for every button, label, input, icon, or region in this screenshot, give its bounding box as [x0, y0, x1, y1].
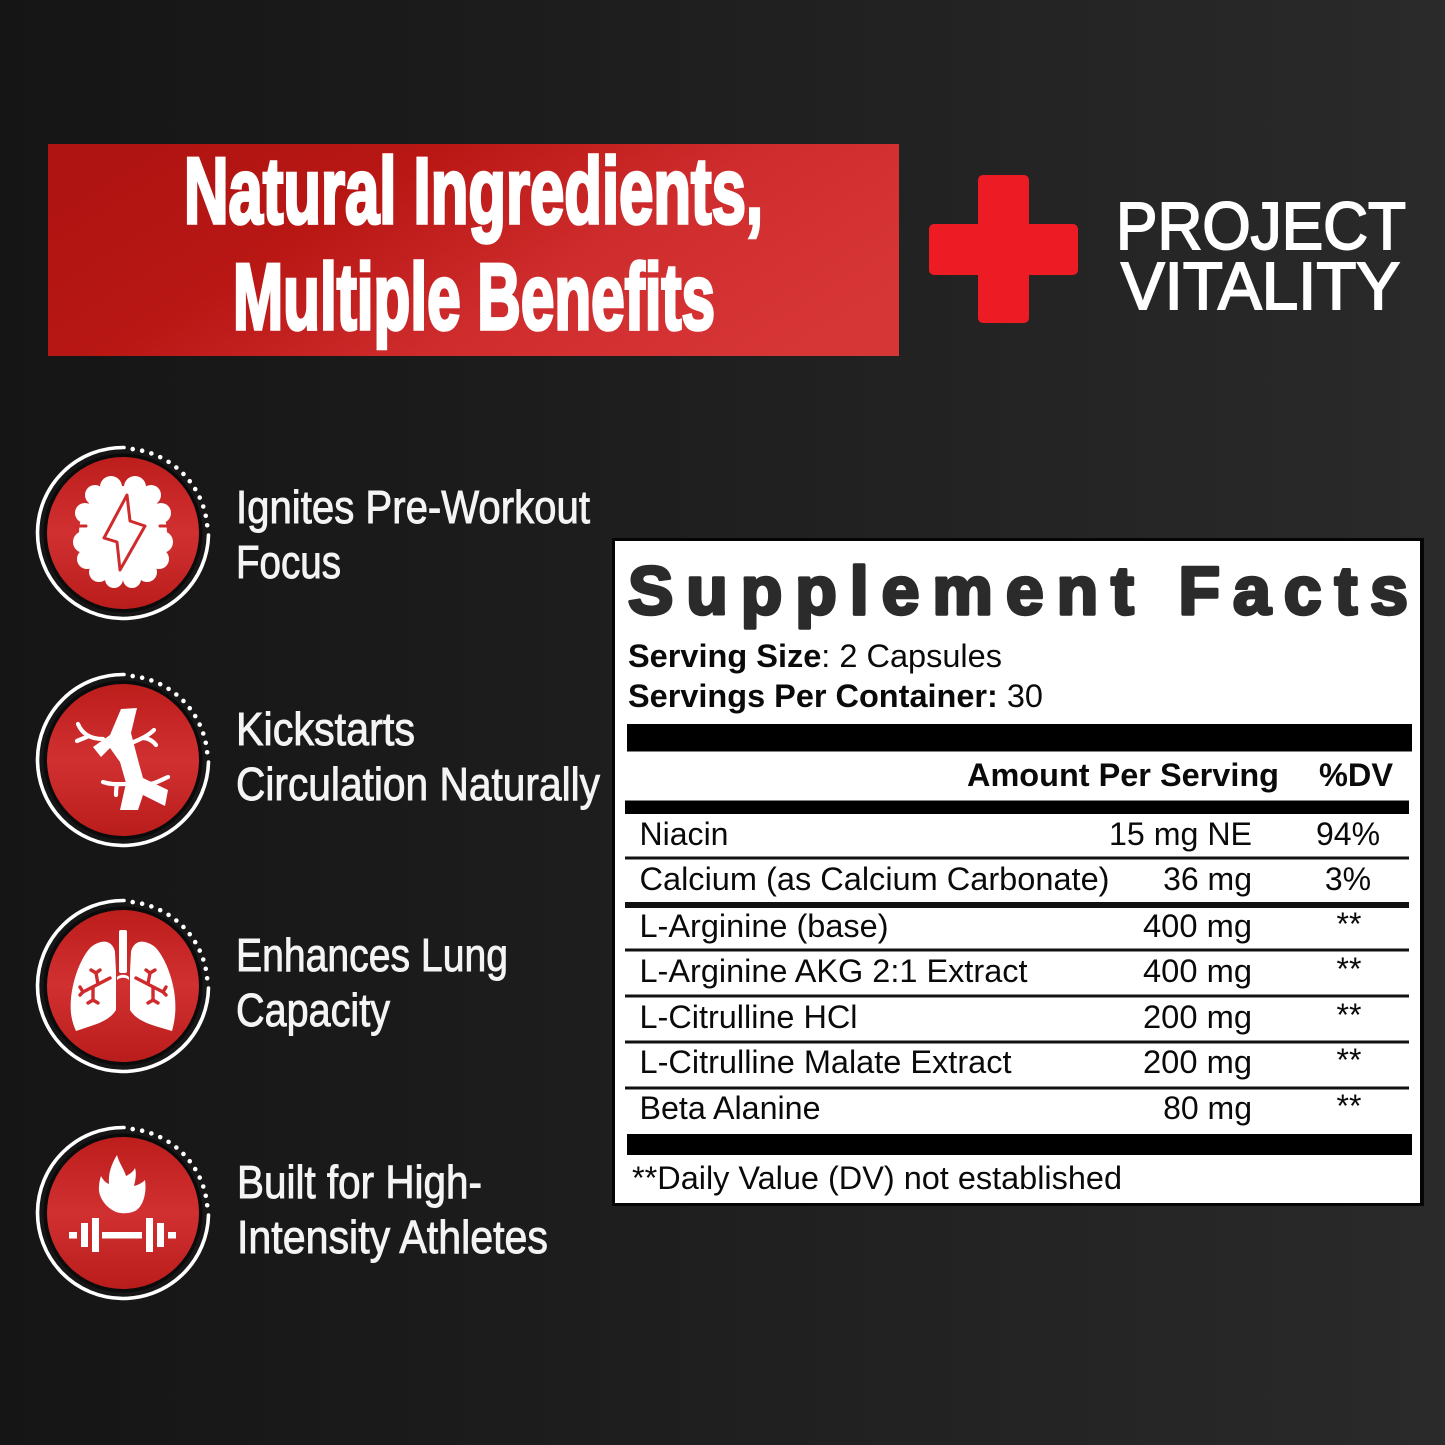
title banner: [48, 138, 899, 356]
title line 2: Multiple Benefits: [233, 244, 715, 349]
benefit text: Ignites Pre-Workout: [236, 481, 590, 533]
benefit text: [237, 1156, 548, 1263]
benefit text: Enhances Lung: [236, 929, 508, 981]
row: Calcium: 36 mg: [1163, 861, 1252, 897]
benefit text: Intensity Athletes: [237, 1211, 548, 1263]
row: L-Citrulline HCl: L-Citrulline HCl: [640, 999, 858, 1035]
column header: amount: Amount Per Serving: [967, 757, 1279, 793]
row: Beta Alanine: 80 mg: [1163, 1090, 1252, 1126]
row: Niacin: [640, 816, 1380, 852]
logo word: PROJECT: PROJECT: [1116, 189, 1406, 264]
benefit text: Built for High-: [237, 1156, 482, 1208]
row: Beta Alanine: Beta Alanine: [640, 1090, 820, 1126]
row: Niacin: 94%: [1316, 816, 1380, 852]
column header: %DV: %DV: [1319, 757, 1394, 793]
title line 1: Natural Ingredients,: [184, 138, 763, 243]
icon badge: lungs: [38, 900, 208, 1071]
row: L-Citrulline Malate: [640, 1042, 1361, 1080]
heading: Supplement Facts: Supplement Facts: [628, 553, 1408, 629]
row: L-Arginine AKG: **: [1337, 951, 1361, 987]
row: L-Arginine AKG: 400 mg: [1143, 953, 1252, 989]
row: Beta Alanine: **: [1337, 1088, 1361, 1124]
benefit text: Focus: [236, 536, 341, 588]
icon badge: brain with lightning: [38, 447, 208, 618]
benefit 3: lungs: [38, 900, 508, 1071]
benefit 2: circulation: [38, 674, 600, 845]
row: L-Arginine (base): [640, 906, 1361, 944]
row: L-Citrulline HCl: 200 mg: [1143, 999, 1252, 1035]
row: L-Arginine AKG: L-Arginine AKG 2:1 Extract: [640, 953, 1028, 989]
benefit 4: athletes: [38, 1127, 548, 1298]
footnote: **Daily Value (DV) not established: [632, 1160, 1122, 1196]
icon: red cross: [929, 175, 1078, 323]
row: L-Citrulline HCl: [640, 997, 1361, 1035]
benefit 1: focus: [38, 447, 590, 618]
row: Calcium: 3%: [1325, 861, 1371, 897]
row: Niacin: Niacin: [640, 816, 728, 852]
benefit text: [236, 703, 600, 810]
row: L-Citrulline Malate: **: [1337, 1042, 1361, 1078]
icon badge: flame and barbell: [38, 1127, 208, 1298]
benefit text: [236, 929, 508, 1036]
row: Calcium: Calcium (as Calcium Carbonate): [640, 861, 1110, 897]
row: L-Citrulline HCl: **: [1337, 997, 1361, 1033]
row: L-Citrulline Malate: L-Citrulline Malate Extract: [640, 1044, 1012, 1080]
row: Calcium: [640, 861, 1371, 897]
icon badge: blood vessel: [38, 674, 208, 845]
panel: supplement facts: [612, 538, 1424, 1206]
servings per container: Servings Per Container: 30: [628, 678, 1043, 714]
logo: Project Vitality: [929, 175, 1406, 324]
benefit text: Kickstarts: [236, 703, 415, 755]
logo word: VITALITY: VITALITY: [1121, 249, 1400, 324]
row: L-Arginine (base): L-Arginine (base): [640, 908, 888, 944]
row: L-Citrulline Malate: 200 mg: [1143, 1044, 1252, 1080]
benefit text: Capacity: [236, 984, 390, 1036]
benefit text: Circulation Naturally: [236, 758, 600, 810]
row: L-Arginine AKG: [640, 951, 1361, 989]
row: L-Arginine (base): **: [1337, 906, 1361, 942]
row: Beta Alanine: [640, 1088, 1361, 1126]
benefit text: [236, 481, 590, 588]
row: Niacin: 15 mg NE: [1109, 816, 1252, 852]
serving size: Serving Size: 2 Capsules: [628, 638, 1002, 674]
row: L-Arginine (base): 400 mg: [1143, 908, 1252, 944]
